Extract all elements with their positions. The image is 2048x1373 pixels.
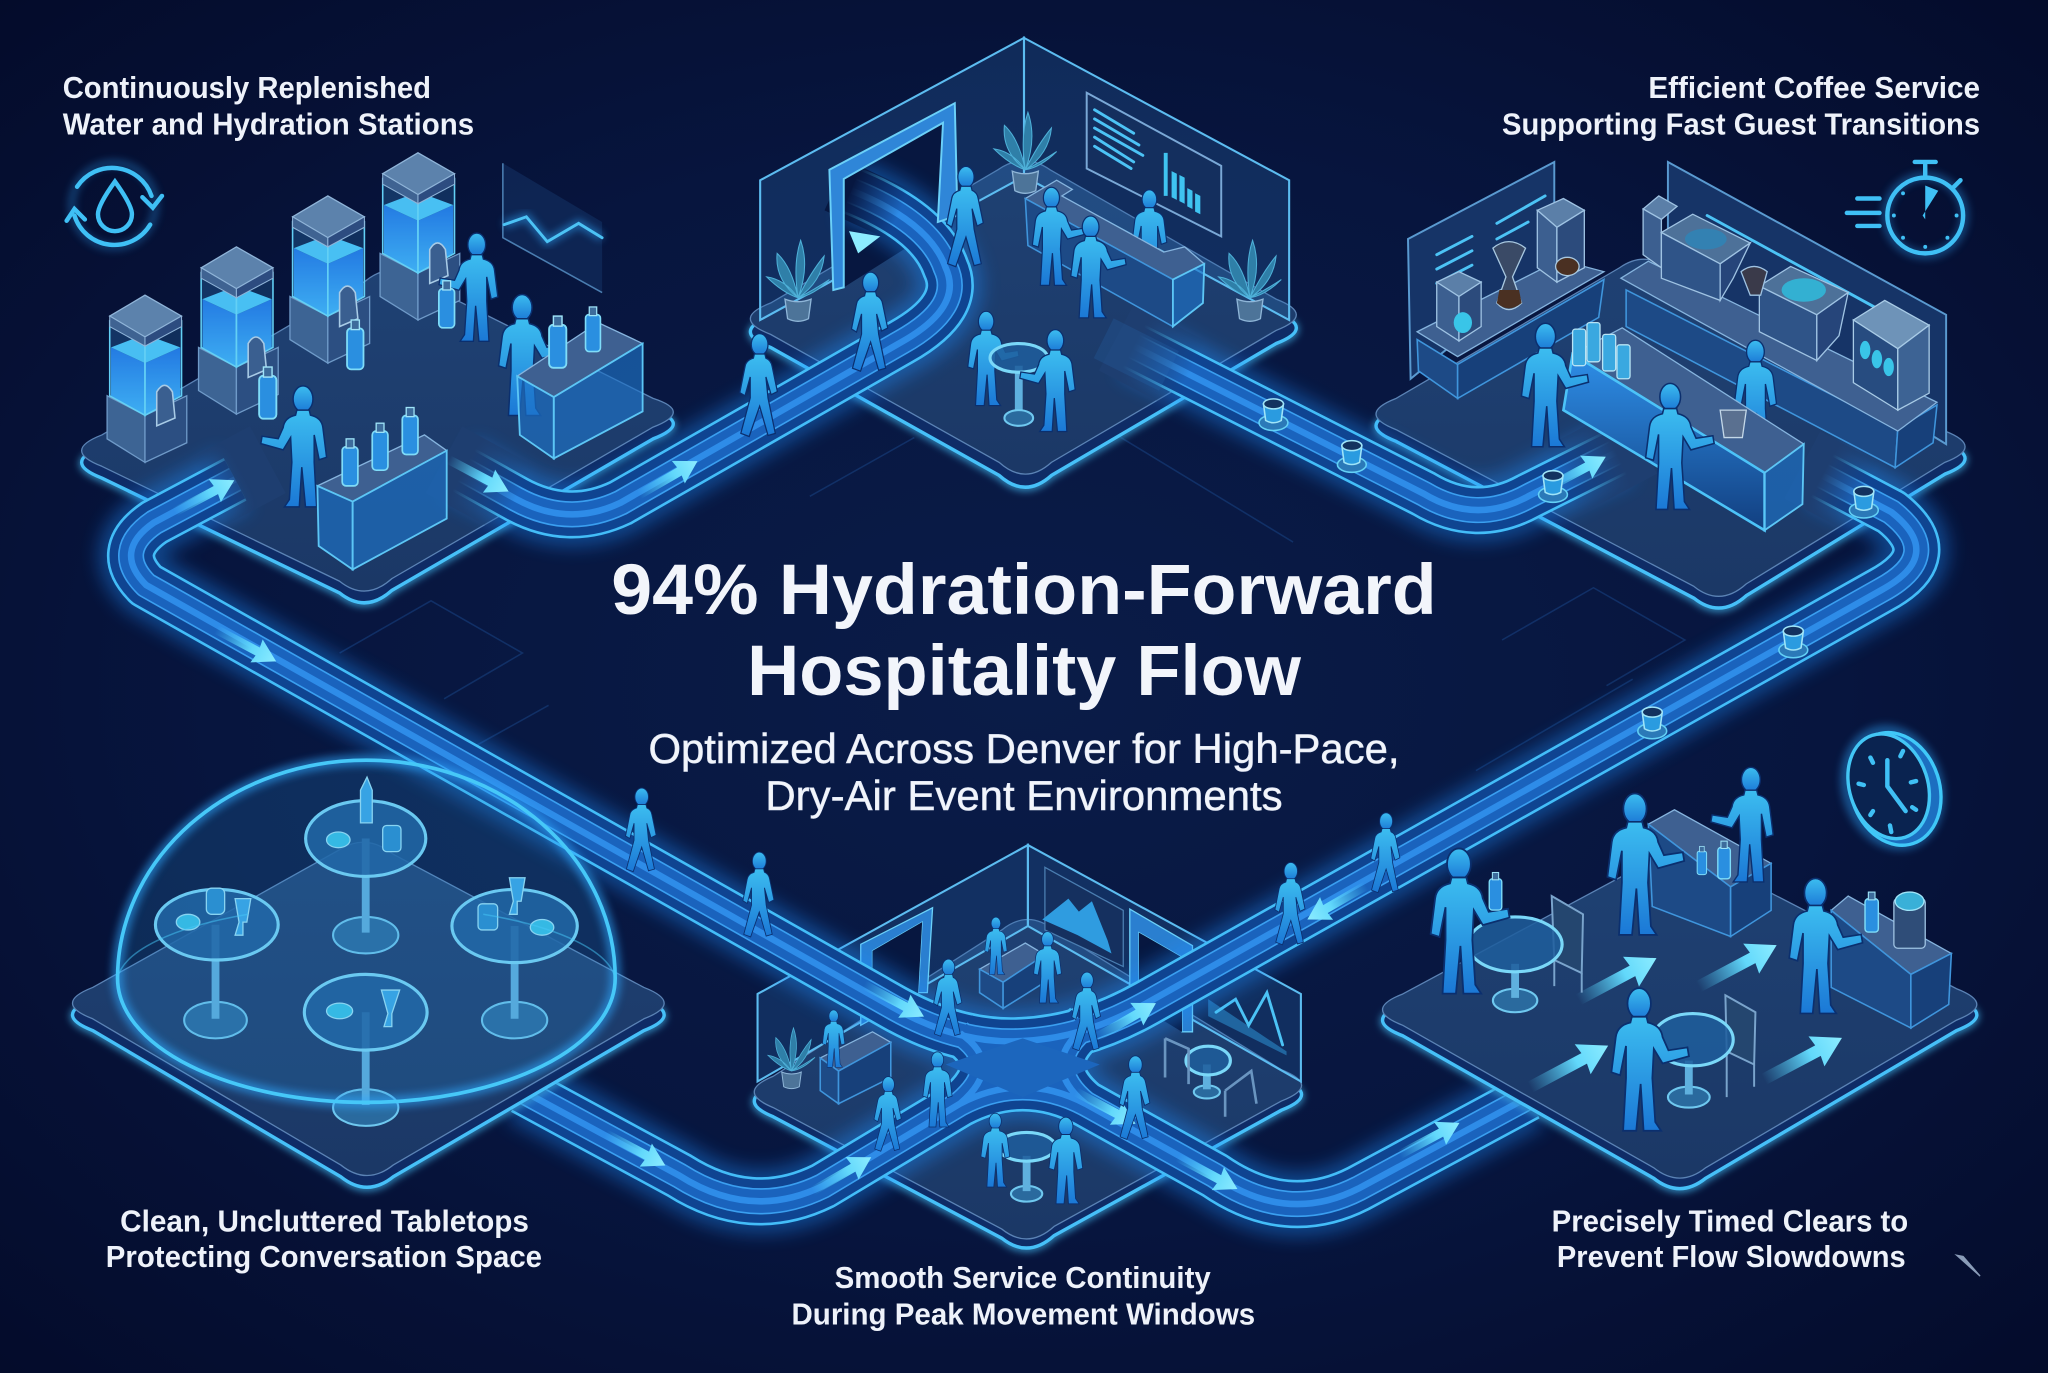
cup cabinet <box>1853 300 1929 410</box>
faint track on lobby floor <box>1104 338 1169 371</box>
label: clean tabletops: Protecting Conversation Space <box>106 1239 542 1274</box>
scene: coffee service <box>1408 162 1946 530</box>
label: service continuity: During Peak Movement Windows <box>792 1296 1255 1331</box>
scene: clean tabletops <box>118 760 615 1126</box>
title <box>611 550 1437 711</box>
host desks <box>820 943 1045 1104</box>
icon: water refill cycle <box>67 163 162 247</box>
table back <box>306 777 426 953</box>
flow arrows on floor <box>1522 930 1850 1102</box>
service bar <box>1563 328 1804 530</box>
subtitle: Optimized Across Denver for High-Pace, <box>648 725 1400 772</box>
water dispensers <box>107 153 460 462</box>
table one <box>1468 917 1562 1012</box>
icon: wall clock <box>1833 719 1955 857</box>
plant <box>768 1028 815 1089</box>
reception counter <box>1025 180 1204 327</box>
wall chart left <box>1042 867 1123 967</box>
right door <box>1130 909 1192 1032</box>
door opening <box>844 123 943 287</box>
band end fades <box>209 185 1861 499</box>
menu wall left <box>1408 162 1554 379</box>
back service counter <box>1648 810 1771 936</box>
coffee guests <box>1521 323 1714 509</box>
background circuit lines <box>340 431 1685 771</box>
menu wall right <box>1668 162 1946 444</box>
platform: clean tabletops floor <box>72 842 664 1189</box>
lobby table <box>990 344 1048 426</box>
door frame: entry lobby <box>829 103 957 290</box>
barista <box>1734 340 1777 448</box>
label: service continuity: Smooth Service Continuity <box>835 1260 1211 1295</box>
label: coffee service: Supporting Fast Guest Transitions <box>1502 107 1980 142</box>
scene: timed clears <box>1431 767 1951 1131</box>
staff and guests <box>822 917 1150 1204</box>
label: clean tabletops <box>106 1204 542 1274</box>
label: hydration stations <box>63 70 474 142</box>
platform: entry lobby floor <box>750 161 1296 488</box>
label: clean tabletops: Clean, Uncluttered Tabletops <box>120 1204 529 1239</box>
tray items <box>1489 841 1730 910</box>
walls: entry lobby <box>760 38 1289 321</box>
icon: stopwatch <box>1847 162 1964 255</box>
brewers <box>1437 199 1584 341</box>
guests <box>259 233 564 507</box>
cup stacks <box>1573 323 1630 379</box>
walls: service continuity <box>758 845 1301 1089</box>
service staff <box>1431 767 1863 1131</box>
crossing hub <box>946 1038 1100 1097</box>
corner mark <box>1957 1255 1980 1276</box>
table front <box>304 974 427 1126</box>
label: coffee service <box>1502 70 1980 142</box>
guest at table <box>1020 330 1075 432</box>
plant right <box>1219 240 1281 321</box>
label: coffee service: Efficient Coffee Service <box>1648 70 1980 105</box>
espresso machines <box>1643 196 1848 360</box>
wall chart <box>503 163 602 293</box>
scene: service continuity <box>820 917 1256 1204</box>
table right <box>452 878 577 1038</box>
platform: hydration stations floor <box>82 270 673 604</box>
platform: timed clears floor <box>1383 849 1977 1190</box>
label: service continuity <box>792 1260 1255 1331</box>
plant back <box>994 112 1057 193</box>
scene: corridor walkers <box>626 788 1400 945</box>
wall screen <box>1087 93 1221 236</box>
bottle counter back <box>517 307 643 458</box>
wall chart right <box>1208 993 1287 1055</box>
lounge set <box>1165 1038 1256 1117</box>
label: hydration stations: Continuously Replenished <box>63 70 431 105</box>
scene: entry lobby <box>740 166 1204 437</box>
right coffee counter <box>1621 261 1937 468</box>
track arrows <box>168 231 1612 1202</box>
protective dome <box>118 760 615 1102</box>
label: hydration stations: Water and Hydration Stations <box>63 107 474 142</box>
clerk <box>1132 190 1167 279</box>
table two <box>1652 1014 1733 1108</box>
subtitle: Dry-Air Event Environments <box>765 772 1283 819</box>
dining set <box>998 1132 1055 1202</box>
label: timed clears: Precisely Timed Clears to <box>1552 1204 1908 1239</box>
scene: hydration stations <box>107 153 643 569</box>
right service counter <box>1831 892 1951 1028</box>
left door <box>861 908 933 1025</box>
takeaway cup <box>1720 410 1746 438</box>
bottle counter front <box>317 408 447 569</box>
flow track bands <box>131 185 1916 1204</box>
title: 94% Hydration-Forward <box>611 550 1437 630</box>
lobby guests <box>740 166 1126 437</box>
label: timed clears <box>1552 1204 1908 1274</box>
title: Hospitality Flow <box>747 631 1302 711</box>
chairs <box>1552 896 1755 1097</box>
left coffee counter <box>1417 260 1604 398</box>
platform: coffee service floor <box>1376 259 1965 609</box>
platform: service continuity floor <box>754 920 1302 1249</box>
label: timed clears: Prevent Flow Slowdowns <box>1557 1239 1906 1274</box>
coffee cups on track <box>1259 399 1878 739</box>
plant left <box>767 240 829 321</box>
table left <box>155 888 278 1038</box>
subtitle <box>648 725 1400 819</box>
